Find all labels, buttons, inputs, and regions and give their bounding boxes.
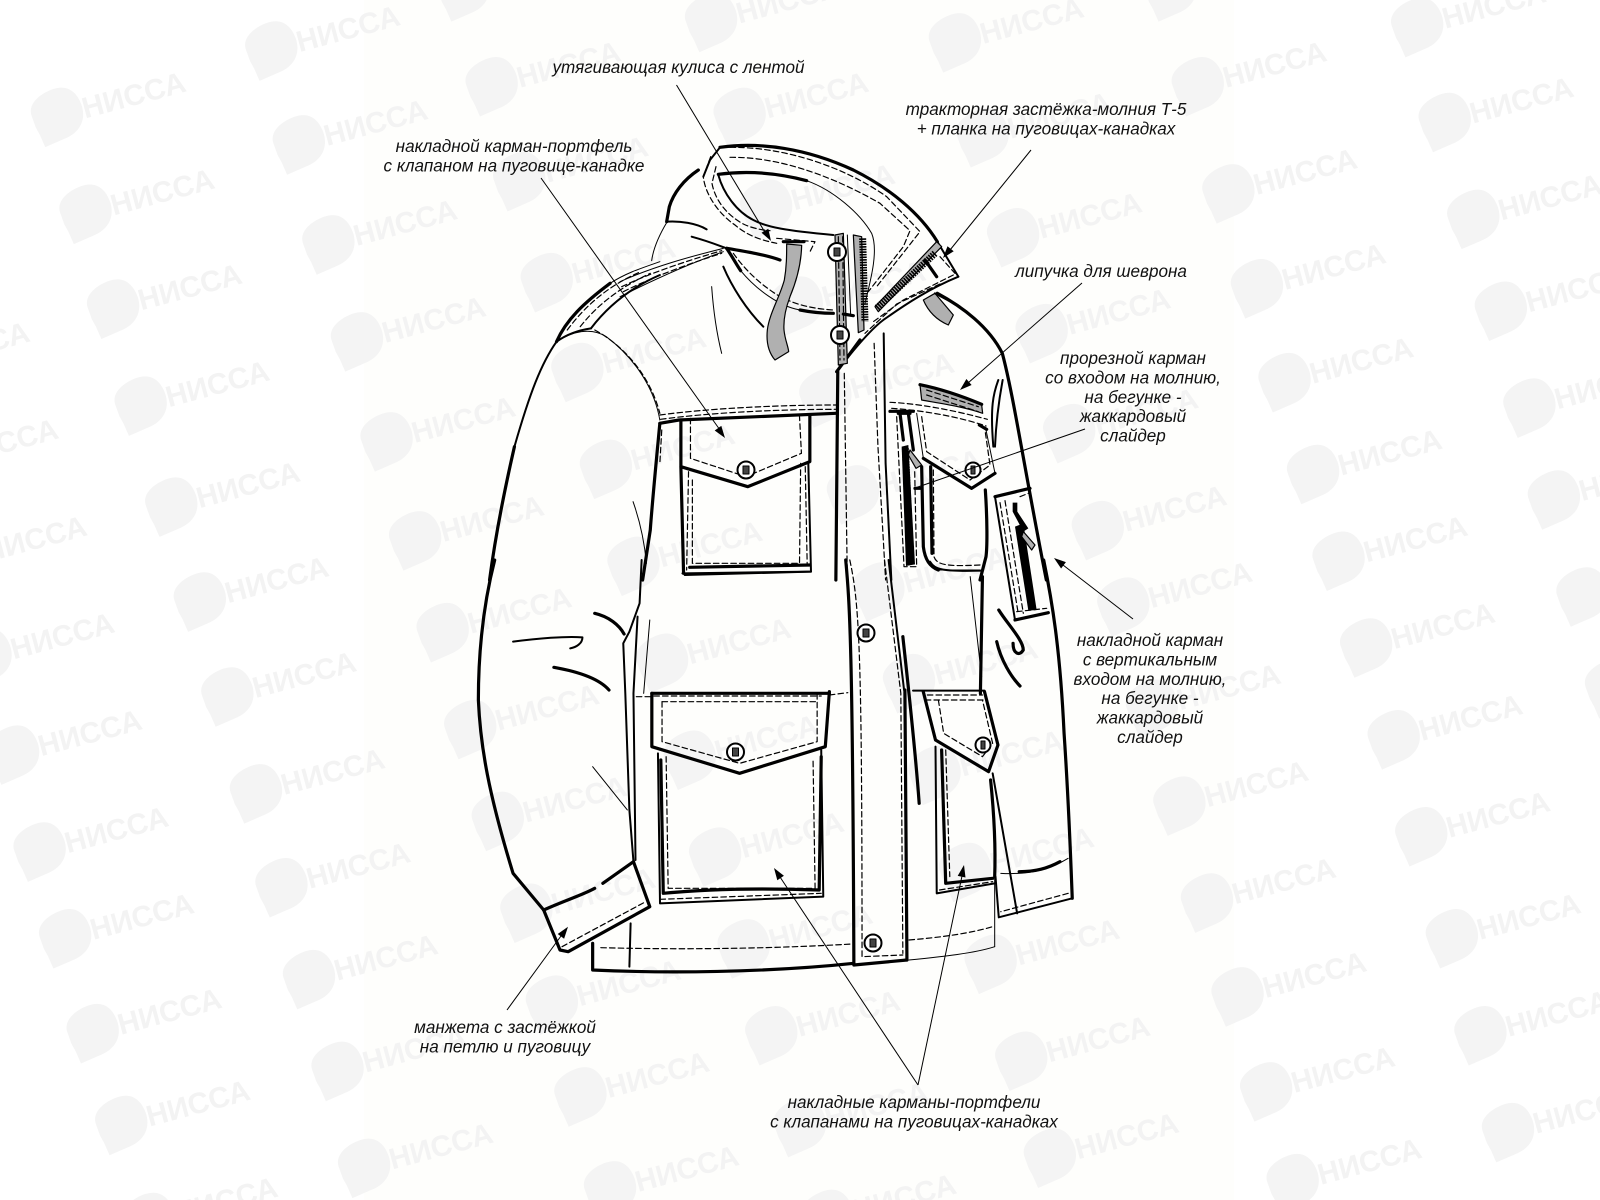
watermark pattern: НИССА — [737, 806, 847, 865]
upper left chest pocket — [681, 415, 811, 575]
button: collar top — [828, 243, 846, 261]
watermark pattern: НИССА — [408, 390, 519, 450]
left shoulder yoke — [557, 262, 836, 463]
button: placket middle — [858, 624, 874, 642]
front placket upper — [836, 333, 891, 580]
leader lines and arrows — [507, 85, 1133, 1085]
watermark pattern: НИССА — [821, 1076, 932, 1135]
button: lower right pocket — [976, 738, 990, 752]
watermark pattern: НИССА — [320, 94, 431, 153]
right chest pocket — [917, 413, 995, 571]
watermark pattern: НИССА — [1063, 282, 1174, 342]
watermark pattern: НИССА — [303, 836, 414, 896]
watermark pattern: НИССА — [61, 801, 172, 860]
watermark pattern: НИССА — [1012, 913, 1123, 972]
label: chest patch pocket: накладной карман-портфель — [396, 137, 632, 156]
watermark pattern: НИССА — [114, 982, 225, 1042]
watermark pattern: НИССА — [602, 1046, 713, 1105]
arrow: lower left pocket — [774, 868, 918, 1085]
watermark pattern: НИССА — [1004, 86, 1115, 146]
watermark pattern: НИССА — [193, 456, 304, 515]
watermark pattern: НИССА — [1071, 1107, 1182, 1166]
watermark pattern: НИССА — [87, 887, 197, 947]
watermark pattern: НИССА — [1145, 556, 1256, 615]
watermark pattern: НИССА — [1043, 1010, 1154, 1069]
watermark pattern: НИССА — [513, 35, 624, 95]
watermark pattern: НИССА — [599, 321, 710, 380]
jacket upper body: shoulder, sleeve, chest pocket — [490, 262, 1046, 580]
watermark pattern: НИССА — [874, 444, 985, 503]
button: placket bottom — [864, 934, 882, 952]
buttons — [727, 243, 990, 952]
watermark pattern: НИССА — [1250, 142, 1361, 202]
watermark pattern: НИССА — [1288, 1040, 1398, 1100]
watermark pattern: НИССА — [1219, 35, 1330, 95]
watermark pattern: НИССА — [793, 984, 904, 1044]
watermark pattern: НИССА — [1228, 852, 1339, 911]
label: lower pockets: с клапанами на пуговицах-канадках — [770, 1112, 1059, 1131]
button: chest right pocket — [966, 462, 980, 478]
arrow: drawcord — [676, 85, 771, 241]
upper pocket bottom remainder — [682, 572, 811, 573]
neck zipper teeth — [853, 235, 865, 333]
watermark pattern: НИССА — [765, 898, 876, 957]
watermark pattern: НИССА — [818, 255, 929, 314]
jacket illustration — [478, 145, 1072, 972]
jacket lower part: waist, lower pockets, hem, cuff — [478, 560, 1072, 972]
label: slit pocket: жаккардовый — [1079, 407, 1187, 426]
left sleeve and body side — [490, 342, 660, 580]
label: sleeve pocket: накладной карман — [1077, 631, 1224, 650]
right shoulder line — [937, 293, 1046, 580]
arrow: chest pocket — [541, 178, 725, 438]
watermark pattern: НИССА — [1278, 237, 1389, 297]
front placket lower — [846, 560, 919, 965]
label: slit pocket: со входом на молнию, — [1045, 368, 1221, 387]
watermark pattern: НИССА — [35, 704, 145, 763]
watermark pattern: НИССА — [78, 66, 189, 125]
watermark pattern: НИССА — [631, 1139, 742, 1199]
button: upper left pocket — [738, 462, 754, 478]
arrow: cuff — [507, 927, 568, 1010]
shoulder band top at hood — [620, 248, 723, 297]
right chest slit zipper — [897, 413, 922, 567]
watermark pattern: НИССА — [655, 515, 766, 574]
watermark pattern: НИССА — [492, 678, 603, 738]
watermark pattern: НИССА — [107, 163, 218, 222]
sleeve creases — [513, 613, 627, 810]
label: cuff: манжета с застёжкой — [414, 1018, 596, 1037]
label: sleeve pocket: входом на молнию, — [1074, 670, 1226, 689]
lower left pocket — [636, 692, 848, 903]
label: sleeve pocket: жаккардовый — [1096, 709, 1204, 728]
watermark pattern: НИССА — [359, 1020, 470, 1079]
label: lower pockets: накладные карманы-портфели — [788, 1093, 1041, 1112]
jacket right chest and sleeve pocket — [890, 380, 1048, 620]
watermark pattern: НИССА — [378, 290, 489, 350]
watermark pattern: НИССА — [1091, 382, 1202, 442]
velcro patch for chevron — [920, 385, 983, 413]
watermark pattern: НИССА — [350, 194, 461, 253]
watermark pattern: НИССА — [573, 954, 684, 1013]
watermark pattern: НИССА — [1473, 887, 1584, 947]
left sleeve lower with cuff — [478, 560, 650, 952]
jacket hem — [593, 923, 995, 972]
watermark pattern: НИССА — [1466, 71, 1577, 130]
watermark pattern: НИССА — [221, 551, 332, 610]
label: velcro: липучка для шеврона — [1014, 262, 1187, 281]
watermark pattern: НИССА — [464, 581, 575, 641]
watermark pattern: НИССА — [1119, 479, 1230, 539]
watermark pattern: НИССА — [1314, 1132, 1425, 1192]
watermark pattern: НИССА — [162, 355, 273, 414]
watermark pattern: НИССА — [249, 646, 360, 705]
arrow: sleeve pocket — [1054, 558, 1133, 619]
button: lower left pocket — [727, 744, 744, 760]
watermark pattern: НИССА — [1035, 186, 1145, 246]
watermark pattern: НИССА — [1173, 658, 1284, 717]
watermark pattern: НИССА — [956, 724, 1067, 783]
watermark pattern: НИССА — [277, 742, 388, 802]
watermark pattern: НИССА — [987, 821, 1097, 880]
watermark pattern: НИССА — [1415, 688, 1526, 748]
watermark pattern: НИССА — [847, 347, 958, 406]
watermark pattern: НИССА — [711, 709, 822, 768]
watermark pattern: НИССА — [437, 489, 547, 549]
label: chest patch pocket: с клапаном на пуговице-канадке — [384, 156, 644, 175]
watermark pattern: НИССА — [1259, 946, 1370, 1005]
hood inner neckline — [727, 248, 833, 313]
button: collar bottom — [831, 326, 849, 344]
watermark pattern: НИССА — [519, 770, 630, 829]
watermark pattern: НИССА — [293, 0, 404, 59]
watermark pattern: НИССА — [568, 231, 679, 291]
watermark pattern: НИССА — [548, 862, 659, 921]
drawstring ribbon — [767, 244, 802, 360]
sleeve pocket — [995, 488, 1048, 620]
hood outer and collar band — [703, 145, 958, 372]
line: slit pocket — [915, 429, 1085, 488]
label: cuff: на петлю и пуговицу — [420, 1037, 592, 1056]
hood back folds — [652, 170, 780, 353]
right yoke seam — [890, 402, 987, 429]
watermark pattern: НИССА — [7, 607, 118, 666]
arrow: velcro — [960, 283, 1082, 390]
watermark pattern: НИССА — [684, 612, 794, 671]
label: sleeve pocket: на бегунке - — [1101, 689, 1199, 708]
label: slit pocket: на бегунке - — [1084, 388, 1182, 407]
label: tractor zipper: + планка на пуговицах-канадках — [917, 119, 1177, 138]
jacket hood, collar and neck zippers — [620, 145, 960, 372]
watermark pattern: НИССА — [788, 158, 898, 217]
watermark pattern: НИССА — [761, 66, 872, 125]
label: sleeve pocket: с вертикальным — [1083, 650, 1217, 669]
watermark pattern: НИССА — [1360, 510, 1471, 569]
watermark pattern: НИССА — [1335, 423, 1445, 482]
watermark pattern: НИССА — [1388, 597, 1498, 656]
label: slit pocket: прорезной карман — [1060, 349, 1207, 368]
neck placket strip — [835, 233, 853, 365]
watermark pattern: НИССА — [1306, 331, 1417, 391]
lower right pocket — [913, 691, 998, 893]
right side and shoulder seam lines — [980, 380, 1003, 580]
watermark pattern: НИССА — [627, 418, 738, 477]
collar tractor zipper — [875, 242, 955, 312]
watermark pattern: НИССА — [900, 540, 1011, 600]
label: sleeve pocket: слайдер — [1117, 728, 1183, 747]
watermark pattern: НИССА — [541, 130, 652, 190]
arrow: lower right pocket — [918, 865, 966, 1085]
right sleeve lower — [996, 560, 1072, 917]
watermark pattern: НИССА — [930, 632, 1041, 692]
watermark pattern: НИССА — [1201, 755, 1312, 814]
watermark pattern: НИССА — [135, 258, 245, 317]
watermark pattern: НИССА — [386, 1117, 496, 1176]
label: drawcord: утягивающая кулиса с лентой — [552, 58, 805, 77]
label: tractor zipper: тракторная застёжка-молния Т-5 — [906, 100, 1187, 119]
shoulder right of collar — [935, 293, 960, 307]
label: slit pocket: слайдер — [1100, 427, 1166, 446]
arrow: tractor zipper — [943, 150, 1031, 258]
drawstring hole — [777, 238, 815, 252]
right strap — [923, 293, 953, 325]
watermark pattern: НИССА — [143, 1074, 254, 1133]
watermark pattern: НИССА — [1443, 785, 1554, 845]
watermark pattern: НИССА — [330, 928, 441, 987]
right body side — [970, 577, 1017, 947]
